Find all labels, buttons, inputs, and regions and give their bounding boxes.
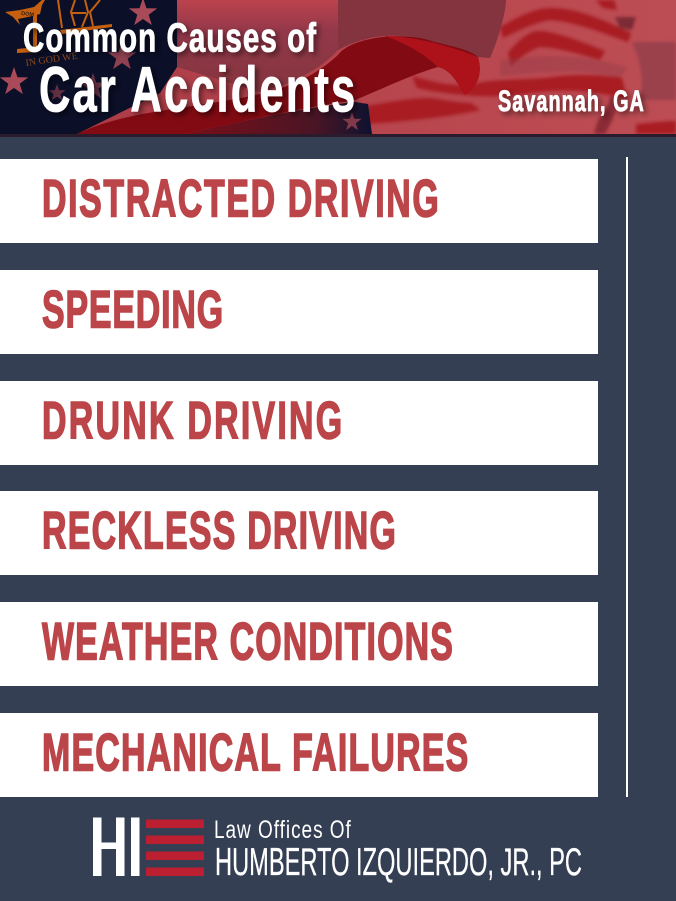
firm line 1: Law Offices Of — [214, 815, 352, 844]
cause 4: reckless driving: RECKLESS DRIVING — [42, 502, 396, 560]
cause 5: weather conditions: WEATHER CONDITIONS — [42, 613, 453, 671]
location: Savannah, GA — [498, 85, 644, 118]
vertical divider — [626, 157, 628, 797]
seal motto: IN GOD WE — [25, 51, 78, 69]
bright red fold highlight — [385, 36, 480, 95]
footer logo — [93, 815, 582, 884]
muted flag flap — [176, 0, 506, 92]
lower canton portion — [183, 102, 372, 134]
georgia seal — [5, 0, 112, 53]
ribbon motto: DOM — [21, 11, 35, 18]
cause 5: weather conditions — [0, 602, 598, 686]
title line 2: Car Accidents — [39, 53, 355, 126]
logo monogram HI — [93, 818, 140, 876]
header banner: flag background — [0, 0, 676, 134]
dark navy canton — [0, 0, 177, 134]
cause 2: speeding — [0, 270, 598, 354]
cause 3: drunk driving — [0, 381, 598, 465]
cause 1: distracted driving — [0, 159, 598, 243]
cause 4: reckless driving — [0, 491, 598, 575]
cause 1: distracted driving: DISTRACTED DRIVING — [42, 170, 439, 228]
header bottom border — [0, 134, 676, 137]
darker flap section — [338, 0, 506, 58]
cause 6: mechanical failures: MECHANICAL FAILURES — [42, 724, 468, 782]
logo red stripes — [146, 820, 204, 876]
canton stars — [0, 0, 361, 130]
cause 3: drunk driving: DRUNK DRIVING — [42, 392, 342, 450]
dark red fold — [77, 36, 480, 134]
title line 1: Common Causes of — [23, 15, 316, 61]
cause 6: mechanical failures — [0, 713, 598, 797]
cause 2: speeding: SPEEDING — [42, 281, 223, 339]
